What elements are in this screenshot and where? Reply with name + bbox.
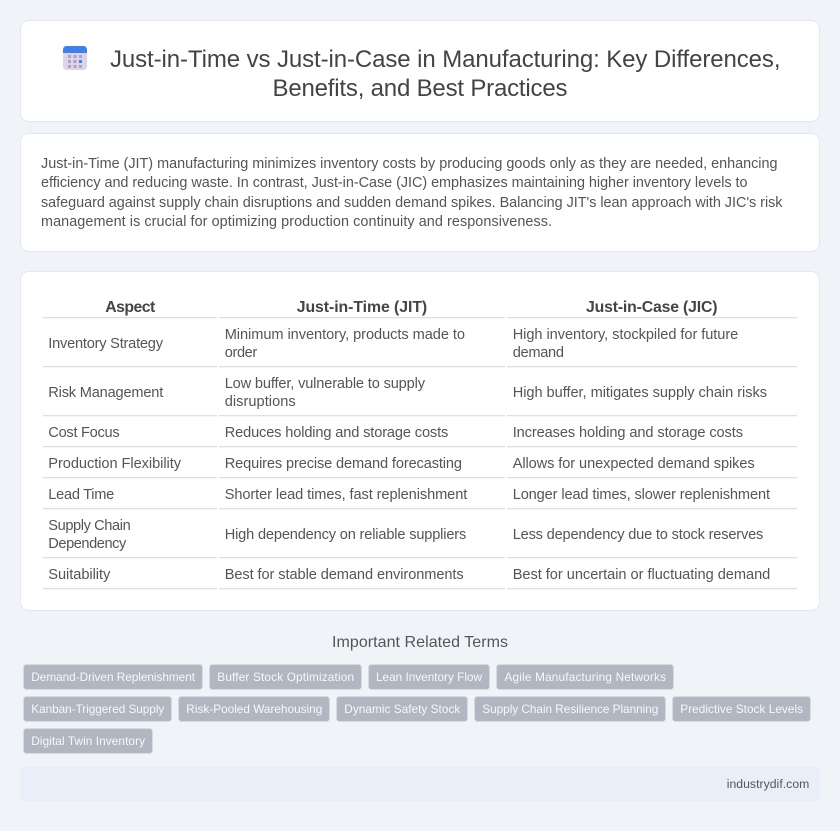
tag: buffer stock optimization xyxy=(210,664,362,690)
tag: agile manufacturing networks: Agile Manufacturing Networks xyxy=(504,670,666,684)
tag: risk-pooled warehousing xyxy=(178,696,330,722)
row: supply chain dependency: Supply Chain xyxy=(48,518,131,534)
row: supply chain dependency xyxy=(43,518,797,558)
row: suitability xyxy=(43,567,797,589)
row: production flexibility: Requires precise demand forecasting xyxy=(225,456,462,472)
row: risk management: High buffer, mitigates supply chain risks xyxy=(513,385,767,401)
tag: agile manufacturing networks xyxy=(496,664,674,690)
row: risk management: Risk Management xyxy=(48,385,163,401)
row: production flexibility: Production Flexibility xyxy=(48,456,182,472)
row: risk management: Low buffer, vulnerable to supply xyxy=(225,376,426,392)
row: inventory strategy: Inventory Strategy xyxy=(48,336,164,352)
footer xyxy=(20,767,820,801)
row: cost focus: Increases holding and storage costs xyxy=(513,425,743,441)
row: supply chain dependency: Dependency xyxy=(48,536,127,552)
table header: Aspect xyxy=(105,299,156,316)
row: suitability: Best for uncertain or fluctuating demand xyxy=(513,567,770,583)
intro text: management is crucial for optimizing production continuity and responsiveness. xyxy=(41,214,552,230)
row: cost focus: Cost Focus xyxy=(48,425,120,441)
related term tags xyxy=(24,664,810,754)
row: production flexibility: Allows for unexpected demand spikes xyxy=(513,456,755,472)
table header: Just-in-Time (JIT) xyxy=(297,299,427,316)
row: lead time: Longer lead times, slower replenishment xyxy=(513,487,770,503)
row: inventory strategy: order xyxy=(225,345,257,361)
row: suitability: Suitability xyxy=(48,567,111,583)
tag: kanban-triggered supply: Kanban-Triggered Supply xyxy=(31,702,164,716)
title: Just-in-Time vs Just-in-Case in Manufacturing: Key Differences, xyxy=(110,46,780,73)
tag: dynamic safety stock xyxy=(336,696,468,722)
tag: demand-driven replenishment: Demand-Driven Replenishment xyxy=(31,670,196,684)
tag: predictive stock levels: Predictive Stock Levels xyxy=(680,702,803,716)
row: lead time xyxy=(43,487,797,509)
tag: digital twin inventory xyxy=(24,728,152,754)
row: cost focus xyxy=(43,425,797,447)
title xyxy=(110,46,780,102)
tag: lean inventory flow xyxy=(368,664,490,690)
tag: dynamic safety stock: Dynamic Safety Stock xyxy=(344,702,460,716)
tag: lean inventory flow: Lean Inventory Flow xyxy=(376,670,482,684)
row: inventory strategy: High inventory, stockpiled for future xyxy=(513,327,738,343)
table header xyxy=(43,299,797,318)
row: lead time: Shorter lead times, fast replenishment xyxy=(225,487,467,503)
tag: demand-driven replenishment xyxy=(24,664,202,690)
row: supply chain dependency: Less dependency due to stock reserves xyxy=(513,527,763,543)
panel: introduction xyxy=(20,134,820,252)
footer: industrydif.com xyxy=(727,777,809,791)
tag: supply chain resilience planning: Supply Chain Resilience Planning xyxy=(482,702,658,716)
row: inventory strategy xyxy=(43,327,797,367)
tag: predictive stock levels xyxy=(672,696,810,722)
tag: digital twin inventory: Digital Twin Inventory xyxy=(31,734,145,748)
tag: kanban-triggered supply xyxy=(24,696,172,722)
intro text: Just-in-Time (JIT) manufacturing minimizes inventory costs by producing goods only as they are needed, enhancing xyxy=(41,156,778,172)
row: risk management xyxy=(43,376,797,416)
row: production flexibility xyxy=(43,456,797,478)
tag: buffer stock optimization: Buffer Stock Optimization xyxy=(217,670,354,684)
intro text: efficiency and reducing waste. In contrast, Just-in-Case (JIC) emphasizes maintaining higher inventory levels to xyxy=(41,175,748,191)
title: Benefits, and Best Practices xyxy=(272,75,568,102)
row: supply chain dependency: High dependency on reliable suppliers xyxy=(225,527,466,543)
row: inventory strategy: demand xyxy=(513,345,564,361)
panel: title card xyxy=(20,20,820,122)
row: lead time: Lead Time xyxy=(48,487,114,503)
tag: supply chain resilience planning xyxy=(474,696,666,722)
icon: calendar xyxy=(63,46,87,70)
tag: risk-pooled warehousing: Risk-Pooled Warehousing xyxy=(186,702,322,716)
row: inventory strategy: Minimum inventory, products made to xyxy=(225,327,465,343)
heading: important related terms: Important Related Terms xyxy=(332,634,508,651)
intro text: safeguard against supply chain disruptions and sudden demand spikes. Balancing JIT's lean approach with JIC's risk xyxy=(41,195,783,211)
row: risk management: disruptions xyxy=(225,394,296,410)
intro text xyxy=(41,156,783,230)
row: suitability: Best for stable demand environments xyxy=(225,567,464,583)
row: cost focus: Reduces holding and storage costs xyxy=(225,425,448,441)
table header: Just-in-Case (JIC) xyxy=(586,299,718,316)
panel: comparison table xyxy=(20,272,820,610)
